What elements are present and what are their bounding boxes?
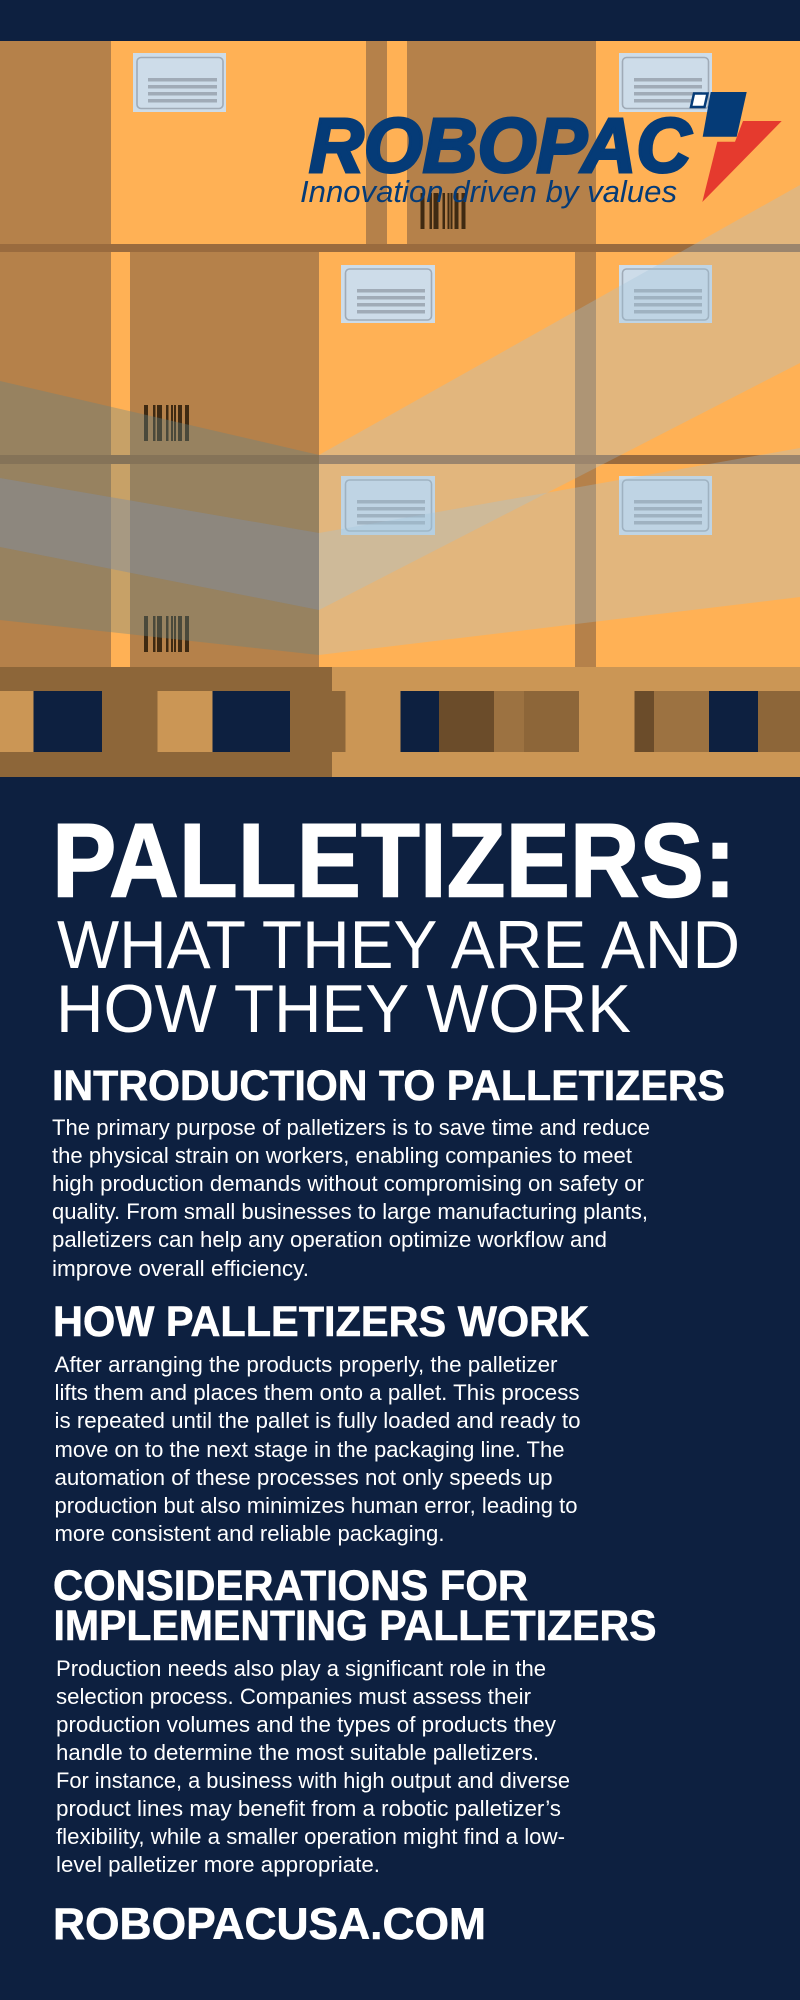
heading: considerations: IMPLEMENTING PALLETIZERS xyxy=(54,1602,656,1650)
shipping label: middle right xyxy=(619,265,712,323)
heading: how palletizers work: HOW PALLETIZERS WORK xyxy=(53,1298,589,1346)
shelf strips between box rows xyxy=(0,244,800,464)
text block: considerations body: Production needs also play a significant role in the xyxy=(56,1656,546,1681)
light beams: left side xyxy=(0,381,319,655)
wooden pallet xyxy=(0,667,800,777)
shipping label: top right xyxy=(619,53,712,112)
logo mark: blue block xyxy=(703,92,747,137)
text block: how palletizers work body: is repeated until the pallet is fully loaded and ready to xyxy=(54,1408,580,1433)
text block: considerations body: level palletizer more appropriate. xyxy=(56,1852,380,1877)
logo wordmark: ROBOPAC xyxy=(309,103,692,189)
heading: considerations: CONSIDERATIONS FOR xyxy=(53,1562,528,1610)
heading: introduction: INTRODUCTION TO PALLETIZERS xyxy=(52,1062,725,1110)
barcode: middle box xyxy=(144,405,189,441)
section: how palletizers work xyxy=(53,1298,589,1546)
text block: considerations body: production volumes and the types of products they xyxy=(56,1712,556,1737)
barcode: top box xyxy=(420,193,466,229)
logo mark: red bolt xyxy=(702,121,782,202)
text block: considerations body: selection process. Companies must assess their xyxy=(56,1684,531,1709)
heading: considerations xyxy=(53,1562,656,1650)
shipping label: lower left xyxy=(341,476,435,535)
title line: Palletizers: PALLETIZERS: xyxy=(52,802,736,920)
text block: how palletizers work body: move on to the next stage in the packaging line. The xyxy=(54,1437,564,1462)
text block: introduction body: improve overall efficiency. xyxy=(52,1256,309,1281)
text block: introduction body: quality. From small businesses to large manufacturing plants, xyxy=(52,1199,648,1224)
text block: introduction body: palletizers can help any operation optimize workflow and xyxy=(52,1227,607,1252)
box shading: top row xyxy=(0,41,596,244)
logo: Robopac xyxy=(300,92,782,209)
text block: how palletizers work body: production but also minimizes human error, leading to xyxy=(54,1493,578,1518)
illustration: stacked cardboard boxes on a pallet xyxy=(0,41,800,777)
text block: how palletizers work body: more consistent and reliable packaging. xyxy=(54,1521,444,1546)
text block: considerations body: handle to determine the most suitable palletizers. xyxy=(56,1740,539,1765)
text block: introduction body: high production demands without compromising on safety or xyxy=(52,1171,644,1196)
text block: how palletizers work body: lifts them and places them onto a pallet. This process xyxy=(54,1380,580,1405)
text block: introduction body: the physical strain on workers, enabling companies to meet xyxy=(52,1143,632,1168)
text block: considerations body xyxy=(56,1656,570,1877)
barcode: lower box xyxy=(144,616,189,652)
section: considerations for implementing palletizers xyxy=(53,1562,656,1877)
box shading: middle and bottom rows xyxy=(0,252,596,667)
text block: considerations body: For instance, a business with high output and diverse xyxy=(56,1768,570,1793)
text block: introduction body xyxy=(52,1115,650,1281)
text block: how palletizers work body: automation of these processes not only speeds up xyxy=(54,1465,552,1490)
section: introduction to palletizers xyxy=(52,1062,725,1281)
shipping label: middle left xyxy=(341,265,435,323)
shipping label: lower right xyxy=(619,476,712,535)
shipping label: top left xyxy=(133,53,226,112)
light beams: right side xyxy=(319,185,800,655)
subtitle line 2: HOW THEY WORK xyxy=(56,971,631,1047)
text block: considerations body: flexibility, while a smaller operation might find a low- xyxy=(56,1824,565,1849)
text block: considerations body: product lines may benefit from a robotic palletizer’s xyxy=(56,1796,561,1821)
text block: how palletizers work body xyxy=(54,1352,580,1546)
title xyxy=(52,802,740,1047)
subtitle line 1: WHAT THEY ARE AND xyxy=(57,907,740,983)
footer: website: ROBOPACUSA.COM xyxy=(53,1900,486,1949)
text block: introduction body: The primary purpose of palletizers is to save time and reduce xyxy=(52,1115,650,1140)
logo tagline: Innovation driven by values xyxy=(300,175,677,209)
logo mark: white square xyxy=(691,94,708,107)
text block: how palletizers work body: After arranging the products properly, the palletizer xyxy=(54,1352,558,1377)
